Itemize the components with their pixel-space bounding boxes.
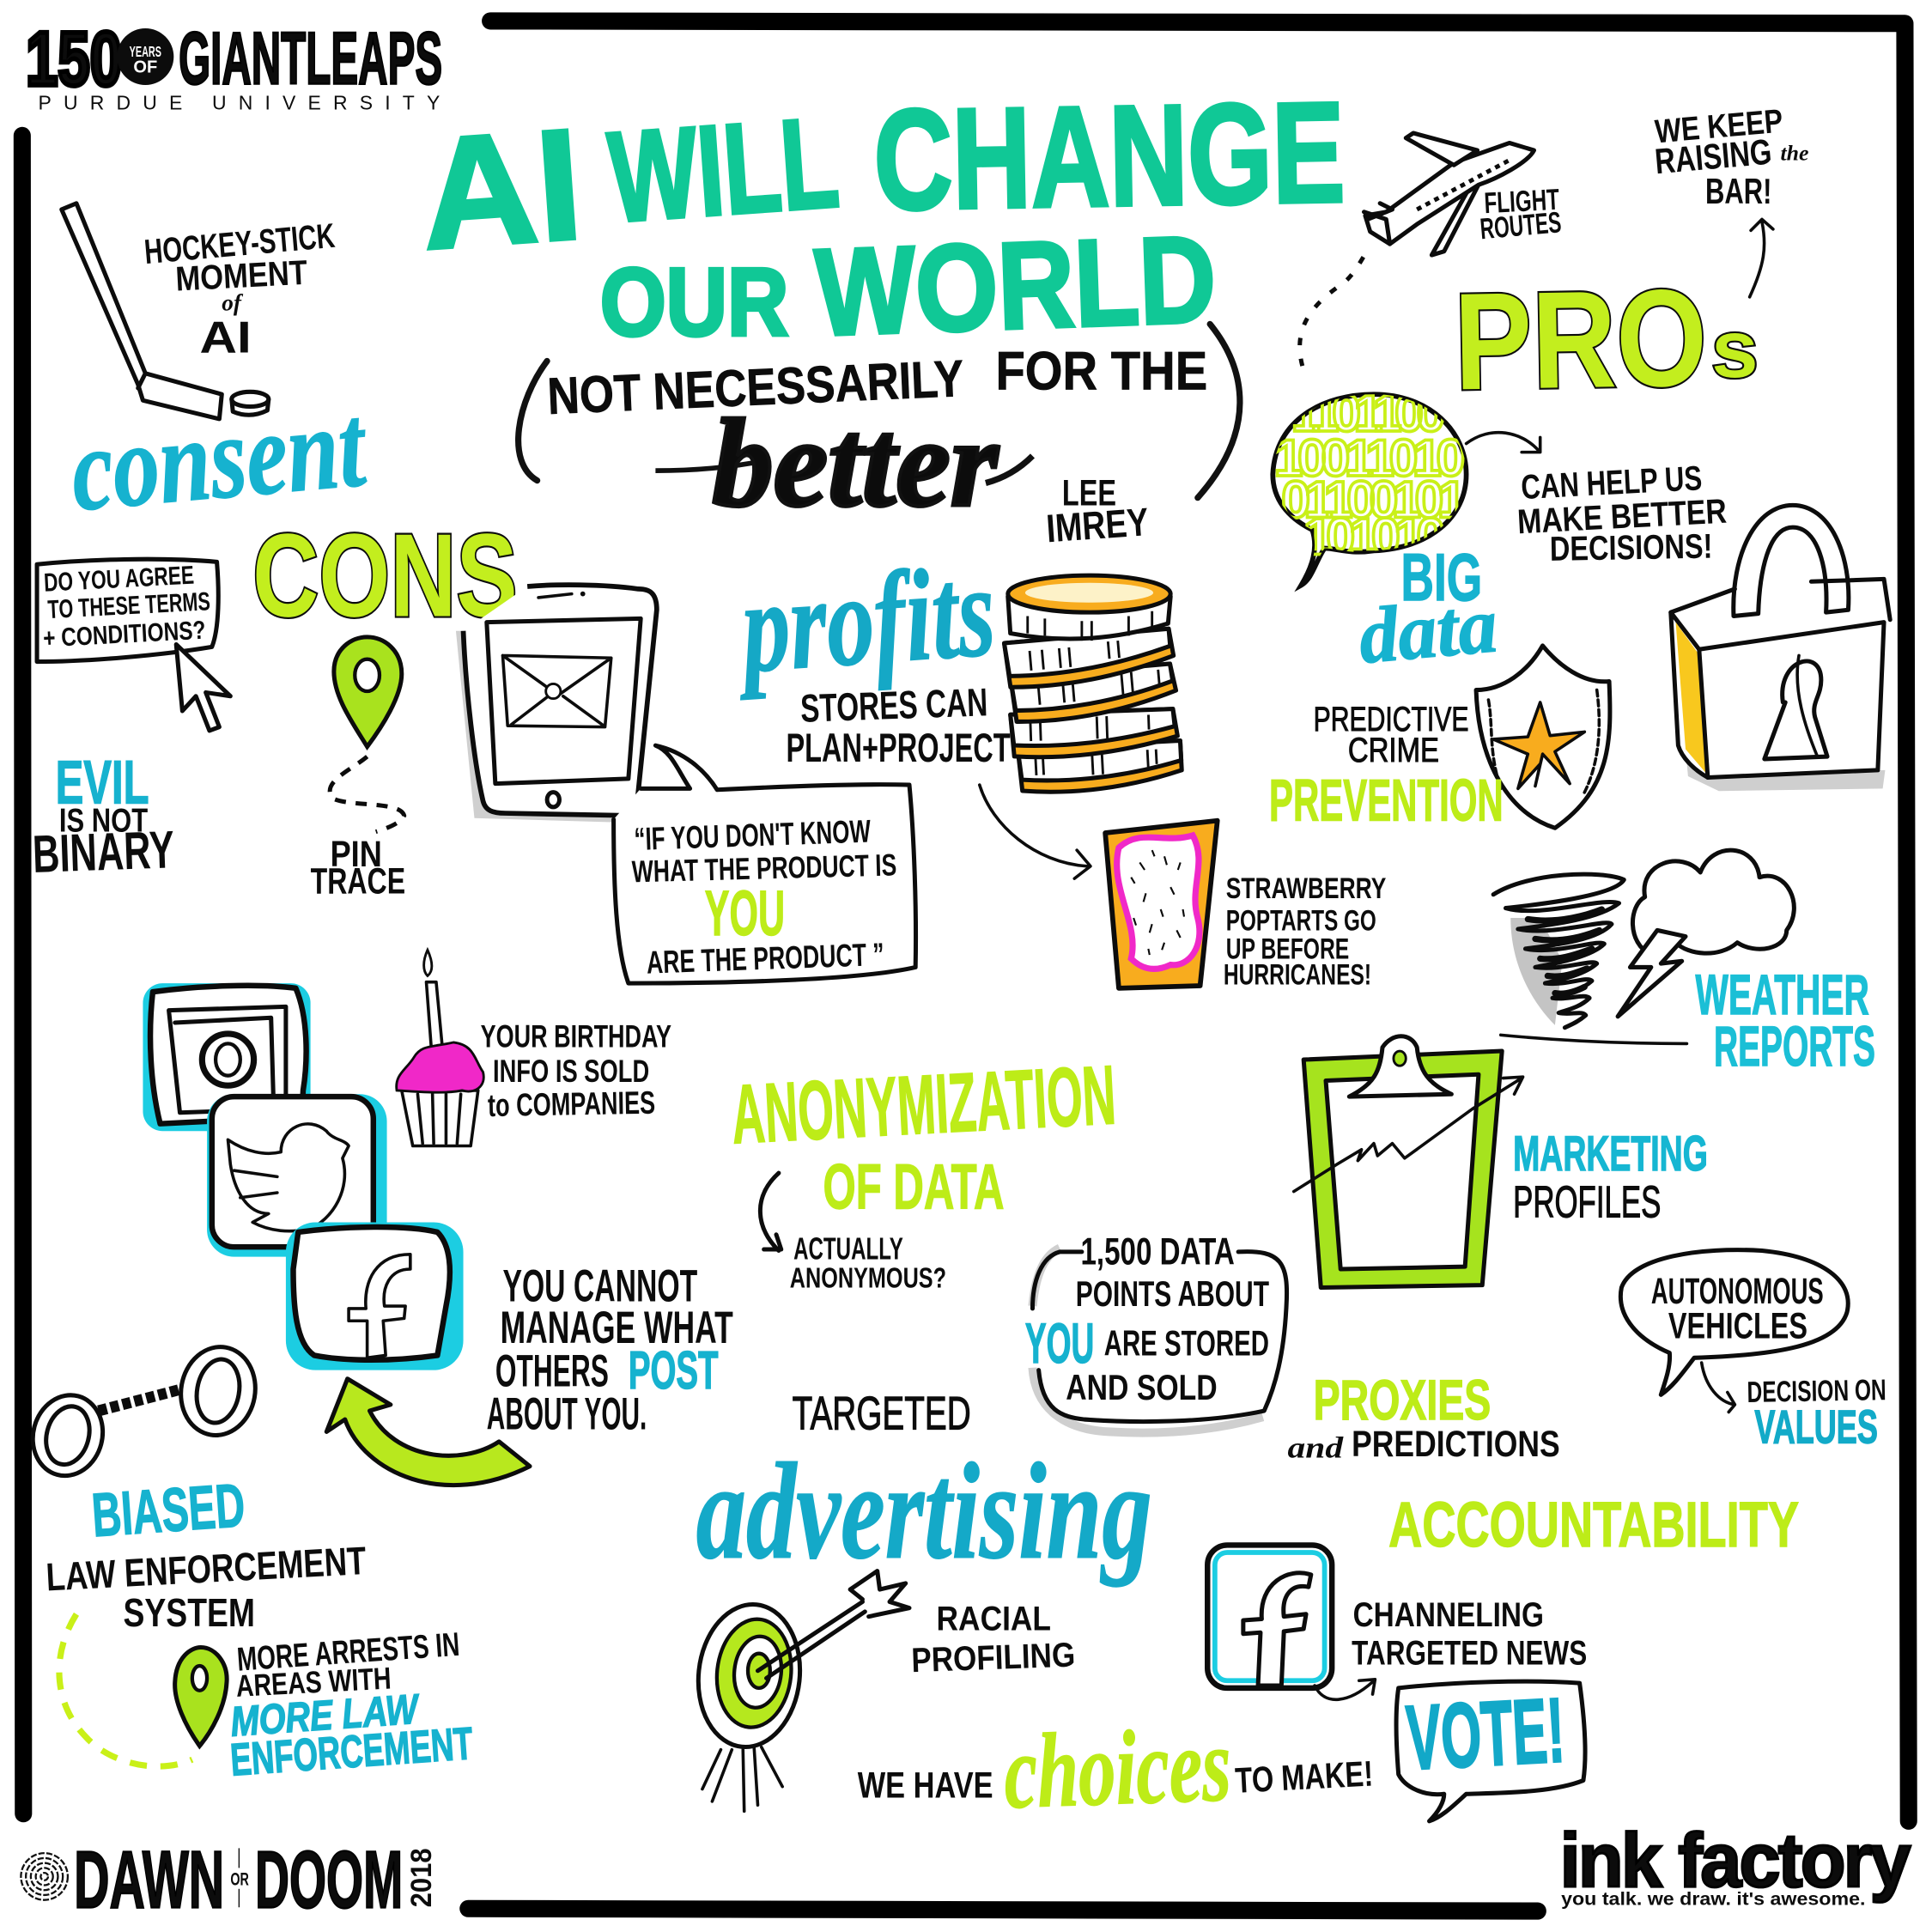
pros heading: PRO	[1453, 261, 1708, 419]
law enforcement	[45, 1538, 368, 1635]
anonymization: ANONYMIZATION	[729, 1048, 1118, 1162]
birthday text	[481, 1018, 671, 1123]
icon: handcuffs	[24, 1341, 262, 1484]
birthday text: YOUR BIRTHDAY	[481, 1018, 671, 1054]
data points box: AND SOLD	[1066, 1367, 1218, 1407]
terms box: DO YOU AGREE	[43, 562, 195, 598]
can help us	[1516, 459, 1728, 568]
quote box	[614, 745, 916, 983]
icon: shield	[1476, 646, 1610, 828]
icon: pin green	[175, 1648, 227, 1746]
you cannot manage text: MANAGE WHAT	[501, 1303, 733, 1353]
poptart text	[1224, 872, 1386, 992]
raising the bar: RAISING	[1653, 131, 1773, 181]
arrow: green curved	[326, 1379, 530, 1485]
logo: ink factory: you talk. we draw. it's awesome.	[1561, 1888, 1866, 1909]
hockey-stick text: of	[222, 290, 244, 316]
logo: 150 years of giant leaps: 150	[26, 15, 122, 101]
data points box: ARE STORED	[1104, 1322, 1269, 1363]
big data: data	[1355, 580, 1500, 680]
autonomous vehicles bubble: AUTONOMOUS	[1651, 1271, 1824, 1312]
actually anonymous arrow	[760, 1173, 781, 1250]
poptart text: HURRICANES!	[1224, 959, 1371, 992]
channeling text	[1352, 1595, 1587, 1673]
law enforcement: LAW ENFORCEMENT	[45, 1538, 368, 1600]
big data bubble: 1101100	[1291, 384, 1445, 442]
flight routes: ROUTES	[1479, 206, 1563, 246]
speaker name: LEE	[1062, 472, 1116, 513]
marketing profiles: PROFILES	[1513, 1177, 1661, 1227]
proxies: and	[1288, 1432, 1344, 1465]
title: WILL	[605, 90, 843, 249]
icon: plane	[1300, 133, 1534, 366]
icon: cursor	[176, 644, 230, 731]
racial profiling	[911, 1599, 1076, 1680]
we have choices to make: choices	[1002, 1705, 1233, 1831]
more arrests text: AREAS WITH	[235, 1662, 392, 1704]
flight routes	[1479, 184, 1563, 246]
autonomous vehicles bubble: VEHICLES	[1668, 1305, 1807, 1346]
poptart text: POPTARTS GO	[1226, 904, 1376, 937]
logo: 150 years of giant leaps: GIANTLEAPS	[179, 18, 442, 100]
hockey-stick text: AI	[199, 312, 252, 361]
hockey-stick text	[143, 216, 337, 361]
arrow up	[1750, 219, 1773, 297]
anonymization	[729, 1048, 1118, 1223]
poptart text: STRAWBERRY	[1226, 872, 1386, 905]
birthday text: to COMPANIES	[488, 1084, 656, 1123]
predictive crime prevention: CRIME	[1348, 731, 1439, 769]
we have choices to make: TO MAKE!	[1234, 1753, 1374, 1801]
actually anonymous: ACTUALLY	[793, 1232, 903, 1267]
flight routes: FLIGHT	[1484, 184, 1560, 220]
title: CHANGE	[872, 72, 1346, 240]
pros heading: s	[1711, 304, 1759, 395]
icon: hockey stick	[62, 204, 269, 419]
logo: dawn or doom: DAWN	[74, 1834, 224, 1925]
can help us: CAN HELP US	[1520, 459, 1703, 507]
cons heading: CONS	[252, 509, 518, 641]
icon: facebook	[286, 1222, 464, 1370]
predictive crime prevention	[1269, 700, 1504, 834]
evil is not binary: EVIL	[56, 749, 149, 817]
channeling text: TARGETED NEWS	[1352, 1634, 1587, 1673]
decision on values	[1747, 1374, 1886, 1453]
title: WORLD	[813, 210, 1218, 361]
we have choices to make	[858, 1705, 1374, 1831]
arrow: coins to poptart	[980, 785, 1091, 878]
terms box: TO THESE TERMS	[47, 587, 211, 624]
marketing profiles	[1513, 1127, 1708, 1227]
more arrests text: MORE LAW	[229, 1686, 422, 1746]
title	[415, 72, 1346, 361]
you cannot manage text	[487, 1261, 733, 1440]
actually anonymous	[790, 1232, 946, 1294]
big data bubble	[1273, 384, 1540, 586]
logo: dawn or doom: OR	[230, 1868, 249, 1889]
logo: 150 years of giant leaps	[26, 15, 442, 114]
predictive crime prevention: PREDICTIVE	[1314, 700, 1468, 738]
targeted advertising: TARGETED	[793, 1388, 971, 1440]
raising the bar: WE KEEP	[1654, 103, 1784, 150]
you cannot manage text: YOU CANNOT	[502, 1261, 697, 1311]
icon: facebook blue	[1207, 1545, 1332, 1688]
stores can plan	[786, 679, 1011, 771]
icon: clipboard	[1294, 1036, 1523, 1288]
big data bubble: 01100101	[1281, 471, 1467, 529]
pin trace: TRACE	[311, 860, 405, 902]
logo: dawn or doom	[21, 1834, 438, 1925]
quote box: ARE THE PRODUCT ”	[646, 936, 884, 981]
marketing profiles: MARKETING	[1513, 1127, 1708, 1182]
channeling text: CHANNELING	[1353, 1595, 1544, 1634]
targeted advertising	[696, 1388, 1152, 1588]
subtitle: FOR THE	[995, 341, 1207, 401]
big data bubble: 10011010	[1274, 428, 1465, 487]
title: OUR	[600, 248, 788, 355]
poptart text: UP BEFORE	[1226, 933, 1349, 965]
profits: profits	[731, 538, 999, 701]
data points box	[1025, 1230, 1287, 1433]
data points box: 1,500 DATA	[1080, 1230, 1235, 1273]
icon: pin	[330, 637, 404, 832]
proxies: PROXIES	[1314, 1368, 1491, 1431]
evil is not binary: IS NOT	[59, 803, 148, 840]
big data bubble: 101010	[1303, 507, 1445, 566]
can help us: MAKE BETTER	[1516, 492, 1728, 541]
evil is not binary	[32, 749, 175, 884]
autonomous vehicles bubble	[1620, 1250, 1848, 1412]
subtitle: NOT NECESSARILY	[546, 349, 965, 425]
stores can plan: PLAN+PROJECT	[786, 726, 1011, 771]
actually anonymous: ANONYMOUS?	[790, 1262, 946, 1294]
icon: lock	[1671, 505, 1890, 791]
icon: coins	[1004, 575, 1182, 794]
targeted advertising: advertising	[696, 1435, 1152, 1588]
quote box: YOU	[705, 877, 785, 949]
speaker name: IMREY	[1045, 499, 1150, 550]
icon: tornado	[1493, 874, 1686, 1043]
logo: ink factory: ink factory	[1560, 1817, 1911, 1903]
biased: BIASED	[90, 1471, 247, 1550]
more arrests text: ENFORCEMENT	[228, 1718, 475, 1786]
birthday text: INFO IS SOLD	[493, 1053, 649, 1089]
big data: BIG	[1401, 541, 1482, 615]
racial profiling: RACIAL	[937, 1599, 1051, 1637]
you cannot manage text: ABOUT YOU.	[487, 1389, 647, 1440]
title: AI	[415, 95, 587, 283]
icon: cloud and lightning	[1618, 850, 1794, 1017]
raising the bar	[1653, 103, 1808, 211]
vote bubble	[1396, 1679, 1585, 1821]
icon: tablet	[456, 585, 657, 823]
logo: 150 years of giant leaps: YEARS	[130, 43, 161, 60]
law enforcement: SYSTEM	[123, 1590, 255, 1635]
stores can plan: STORES CAN	[799, 679, 988, 731]
proxies: PREDICTIONS	[1352, 1424, 1560, 1465]
data points box: YOU	[1025, 1311, 1094, 1375]
pin trace: PIN	[331, 834, 382, 875]
social icons	[143, 983, 464, 1370]
raising the bar: BAR!	[1705, 171, 1771, 211]
logo: 150 years of giant leaps: PURDUE UNIVERSITY	[38, 92, 440, 114]
logo: dawn or doom: 2018	[405, 1848, 438, 1907]
hockey-stick text: MOMENT	[174, 253, 308, 299]
icon: twitter	[207, 1094, 387, 1257]
arrow to vote	[1315, 1680, 1375, 1699]
icon: target	[691, 1571, 909, 1811]
quote box: “IF YOU DON'T KNOW	[634, 813, 872, 857]
icon: instagram	[143, 983, 311, 1131]
you cannot manage text: OTHERS	[495, 1346, 609, 1396]
icon: cupcake	[397, 950, 483, 1146]
pin trace	[311, 834, 405, 902]
data points box: POINTS ABOUT	[1076, 1273, 1269, 1314]
raising the bar: the	[1781, 141, 1808, 166]
logo: 150 years of giant leaps: OF	[133, 58, 157, 77]
racial profiling: PROFILING	[911, 1636, 1076, 1680]
terms box: + CONDITIONS?	[42, 617, 206, 653]
subtitle	[519, 324, 1240, 532]
we have choices to make: WE HAVE	[858, 1765, 993, 1807]
icon: poptart	[1105, 821, 1218, 988]
hockey-stick text: HOCKEY-STICK	[143, 216, 337, 271]
subtitle: better	[712, 393, 999, 532]
logo: dawn or doom: DOOM	[255, 1834, 403, 1925]
more arrests text	[228, 1626, 475, 1786]
quote box: WHAT THE PRODUCT IS	[631, 848, 897, 889]
anonymization: OF DATA	[823, 1151, 1004, 1223]
you cannot manage text: POST	[629, 1341, 719, 1400]
more arrests text: MORE ARRESTS IN	[236, 1626, 461, 1679]
dashed path	[59, 1614, 192, 1766]
weather reports	[1695, 963, 1875, 1078]
consent: consent	[66, 380, 372, 536]
predictive crime prevention: PREVENTION	[1269, 768, 1504, 834]
proxies	[1288, 1368, 1560, 1465]
terms box	[37, 559, 218, 662]
vote bubble: VOTE!	[1404, 1679, 1567, 1789]
evil is not binary: BINARY	[32, 820, 175, 884]
speaker name	[1045, 472, 1150, 550]
can help us: DECISIONS!	[1550, 527, 1713, 568]
